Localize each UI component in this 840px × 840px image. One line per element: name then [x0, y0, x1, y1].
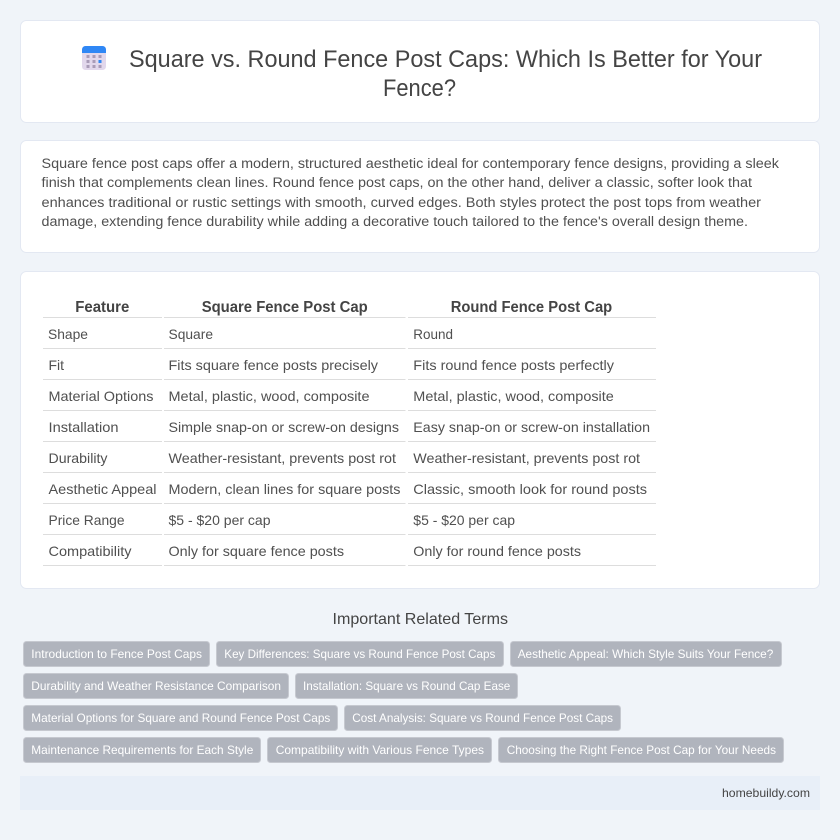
row: material options — [48, 388, 614, 404]
row: compatibility — [48, 543, 581, 559]
row: installation — [48, 419, 650, 435]
footer: homebuildy.com — [722, 786, 810, 800]
footer — [20, 776, 820, 810]
chip: maintenance — [24, 738, 260, 762]
panel: comparison table card — [20, 272, 820, 588]
row: shape: Square — [168, 326, 213, 342]
row: fit: Fits square fence posts precisely — [168, 357, 378, 373]
row: price range — [48, 512, 515, 528]
row: material options: Material Options — [48, 388, 154, 404]
panel: header card — [20, 20, 820, 122]
chip: durability: Durability and Weather Resistance Comparison — [31, 679, 281, 693]
table header row: Feature — [75, 299, 130, 316]
row: durability: Durability — [48, 450, 108, 466]
chip: introduction: Introduction to Fence Post Caps — [31, 647, 202, 661]
chip: maintenance: Maintenance Requirements for Each Style — [31, 743, 254, 757]
row: aesthetic appeal — [48, 481, 647, 497]
title: Fence? — [383, 75, 456, 102]
chip: choosing — [498, 738, 784, 762]
chip: installation: Installation: Square vs Round Cap Ease — [303, 679, 511, 693]
chip: key differences — [216, 642, 504, 666]
row: price range: $5 - $20 per cap — [413, 512, 515, 528]
row: aesthetic appeal: Aesthetic Appeal — [48, 481, 156, 497]
row: fit — [48, 357, 614, 373]
row: material options: Metal, plastic, wood, composite — [168, 388, 370, 404]
panel: intro text card — [20, 140, 820, 252]
chip: material options — [24, 706, 338, 730]
chip: aesthetic appeal: Aesthetic Appeal: Which Style Suits Your Fence? — [518, 647, 774, 661]
row: compatibility: Only for round fence posts — [413, 543, 581, 559]
row: shape: Shape — [48, 326, 88, 342]
chip: cost analysis — [344, 706, 620, 730]
row: price range: Price Range — [48, 512, 125, 528]
row: installation: Easy snap-on or screw-on installation — [413, 419, 650, 435]
chip: choosing: Choosing the Right Fence Post Cap for Your Needs — [507, 743, 776, 757]
text block: introduction — [42, 156, 780, 230]
title: Square vs. Round Fence Post Caps: Which Is Better for Your — [129, 46, 762, 73]
table header row: Square Fence Post Cap — [202, 299, 368, 316]
row: shape — [48, 326, 453, 342]
row: shape: Round — [413, 326, 453, 342]
row: installation: Installation — [48, 419, 118, 435]
row: durability — [48, 450, 640, 466]
row: installation: Simple snap-on or screw-on designs — [168, 419, 399, 435]
row: durability: Weather-resistant, prevents post rot — [413, 450, 640, 466]
title — [129, 46, 762, 102]
text block: introduction: finish that complements clean lines. Round fence post caps, on the other hand, deliver a classic, softer look that — [42, 175, 752, 191]
chip: key differences: Key Differences: Square vs Round Fence Post Caps — [224, 647, 495, 661]
row: price range: $5 - $20 per cap — [168, 512, 271, 528]
text block: introduction: damage, extending fence durability while adding a decorative touch tailored to the fence's overall design theme. — [42, 214, 748, 230]
row: durability: Weather-resistant, prevents post rot — [168, 450, 396, 466]
row: fit: Fits round fence posts perfectly — [413, 357, 614, 373]
chip: installation — [296, 674, 518, 698]
row: fit: Fit — [48, 357, 64, 373]
row: compatibility: Compatibility — [48, 543, 132, 559]
row: compatibility: Only for square fence posts — [168, 543, 344, 559]
table header row: Round Fence Post Cap — [451, 299, 612, 316]
chip: compatibility: Compatibility with Various Fence Types — [276, 743, 484, 757]
icon: calendar — [82, 46, 106, 70]
chip: compatibility — [268, 738, 492, 762]
chip: material options: Material Options for Square and Round Fence Post Caps — [31, 711, 330, 725]
row: aesthetic appeal: Classic, smooth look for round posts — [413, 481, 647, 497]
chip: aesthetic appeal — [510, 642, 782, 666]
table header row — [75, 299, 612, 316]
chip: cost analysis: Cost Analysis: Square vs Round Fence Post Caps — [352, 711, 613, 725]
chip: durability — [24, 674, 288, 698]
row: material options: Metal, plastic, wood, composite — [413, 388, 614, 404]
chip: introduction — [24, 642, 210, 666]
text block: introduction: enhances traditional or rustic settings with smooth, curved edges. Both styles protect the post tops from weather — [42, 195, 761, 211]
comparison table — [43, 299, 656, 566]
heading: important related terms: Important Related Terms — [332, 611, 508, 628]
row: aesthetic appeal: Modern, clean lines for square posts — [168, 481, 400, 497]
text block: introduction: Square fence post caps offer a modern, structured aesthetic ideal for contemporary fence designs, providing a sleek — [42, 156, 780, 172]
panel: related term chips — [24, 642, 784, 762]
